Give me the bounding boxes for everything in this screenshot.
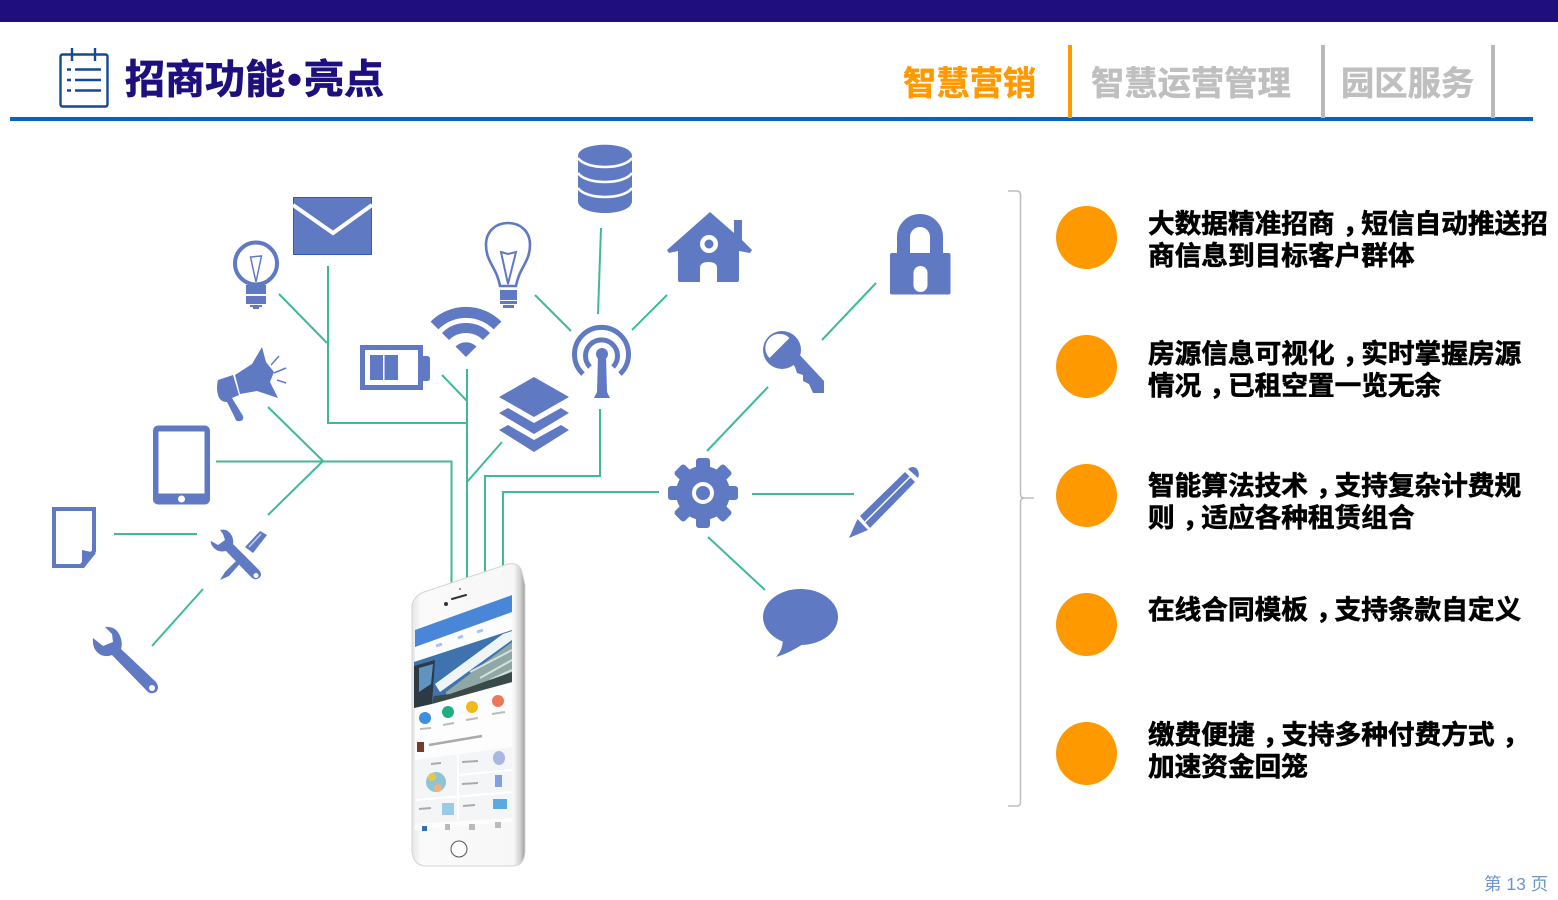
icon: key: [763, 331, 824, 393]
text 5: 缴费便捷 ，支持多种付费方式 ，: [1148, 720, 1529, 750]
tab: smart marketing: 智慧营销: [903, 66, 1036, 103]
icon: house: [667, 212, 752, 282]
phone service cards: [415, 747, 512, 824]
brace: [1008, 190, 1034, 807]
diagram: connected icons and phone: [52, 144, 950, 866]
phone tabs: [436, 630, 483, 646]
tab divider gray: [1321, 45, 1325, 118]
phone header bar: [415, 595, 512, 647]
icon: speech bubble: [763, 589, 838, 657]
page number: 第 13 页: [1484, 874, 1548, 894]
icon: document: [54, 509, 96, 568]
tab divider gray end: [1491, 45, 1495, 118]
connector lines: [114, 228, 876, 646]
phone photo: [414, 630, 512, 708]
phone screen: [415, 595, 512, 830]
text 1: 商信息到目标客户群体: [1148, 241, 1415, 271]
phone shortcut labels: [420, 712, 505, 729]
text 3: 则 ，适应各种租赁组合: [1148, 503, 1415, 533]
text 4: 在线合同模板 ，支持条款自定义: [1148, 595, 1521, 625]
phone home button: [451, 841, 467, 857]
text 3: 智能算法技术 ，支持复杂计费规: [1148, 471, 1521, 501]
phone: [412, 564, 525, 866]
icon: pencil: [849, 467, 919, 538]
top band: [0, 0, 1558, 22]
icon: wrench and screwdriver: [211, 530, 267, 580]
bullet 4: [1056, 592, 1117, 656]
bullet 3: [1056, 464, 1117, 526]
icon: tablet: [153, 426, 210, 504]
header rule: [10, 117, 1533, 121]
bullet 2: [1056, 334, 1117, 398]
bullet 5: [1056, 722, 1117, 784]
icon: antenna: [574, 327, 629, 398]
icon: wifi: [434, 312, 498, 357]
phone shortcut icons: [419, 695, 504, 724]
text 2: 房源信息可视化 ，实时掌握房源: [1148, 339, 1521, 369]
text 1: 大数据精准招商 ，短信自动推送招: [1148, 209, 1548, 239]
icon: wrench: [93, 627, 158, 693]
icon: layers: [499, 377, 569, 452]
icon: tall light bulb: [486, 223, 530, 308]
icon: database: [578, 145, 632, 213]
title: 招商功能•亮点: [125, 58, 384, 102]
bullet 1: [1056, 206, 1117, 268]
icon: envelope: [293, 198, 372, 254]
tab: park services: 园区服务: [1341, 66, 1474, 103]
phone earpiece: [444, 588, 466, 606]
text 1: [1148, 209, 1548, 271]
icon: megaphone: [217, 347, 286, 421]
text 5: 加速资金回笼: [1148, 752, 1308, 782]
icon: notepad: [59, 48, 109, 108]
tab: smart operations management: 智慧运营管理: [1091, 66, 1291, 103]
icon: round light bulb: [235, 242, 277, 309]
icon: gear: [668, 458, 738, 528]
tab divider orange: [1068, 45, 1072, 118]
icon: padlock: [890, 221, 950, 294]
text 5: [1148, 720, 1529, 782]
text 3: [1148, 471, 1521, 533]
phone body: [412, 564, 525, 866]
phone notice row: [417, 736, 482, 752]
phone tab bar: [422, 822, 501, 831]
text 2: [1148, 339, 1522, 401]
text 2: 情况 ，已租空置一览无余: [1148, 371, 1441, 401]
icon: battery: [362, 348, 430, 388]
